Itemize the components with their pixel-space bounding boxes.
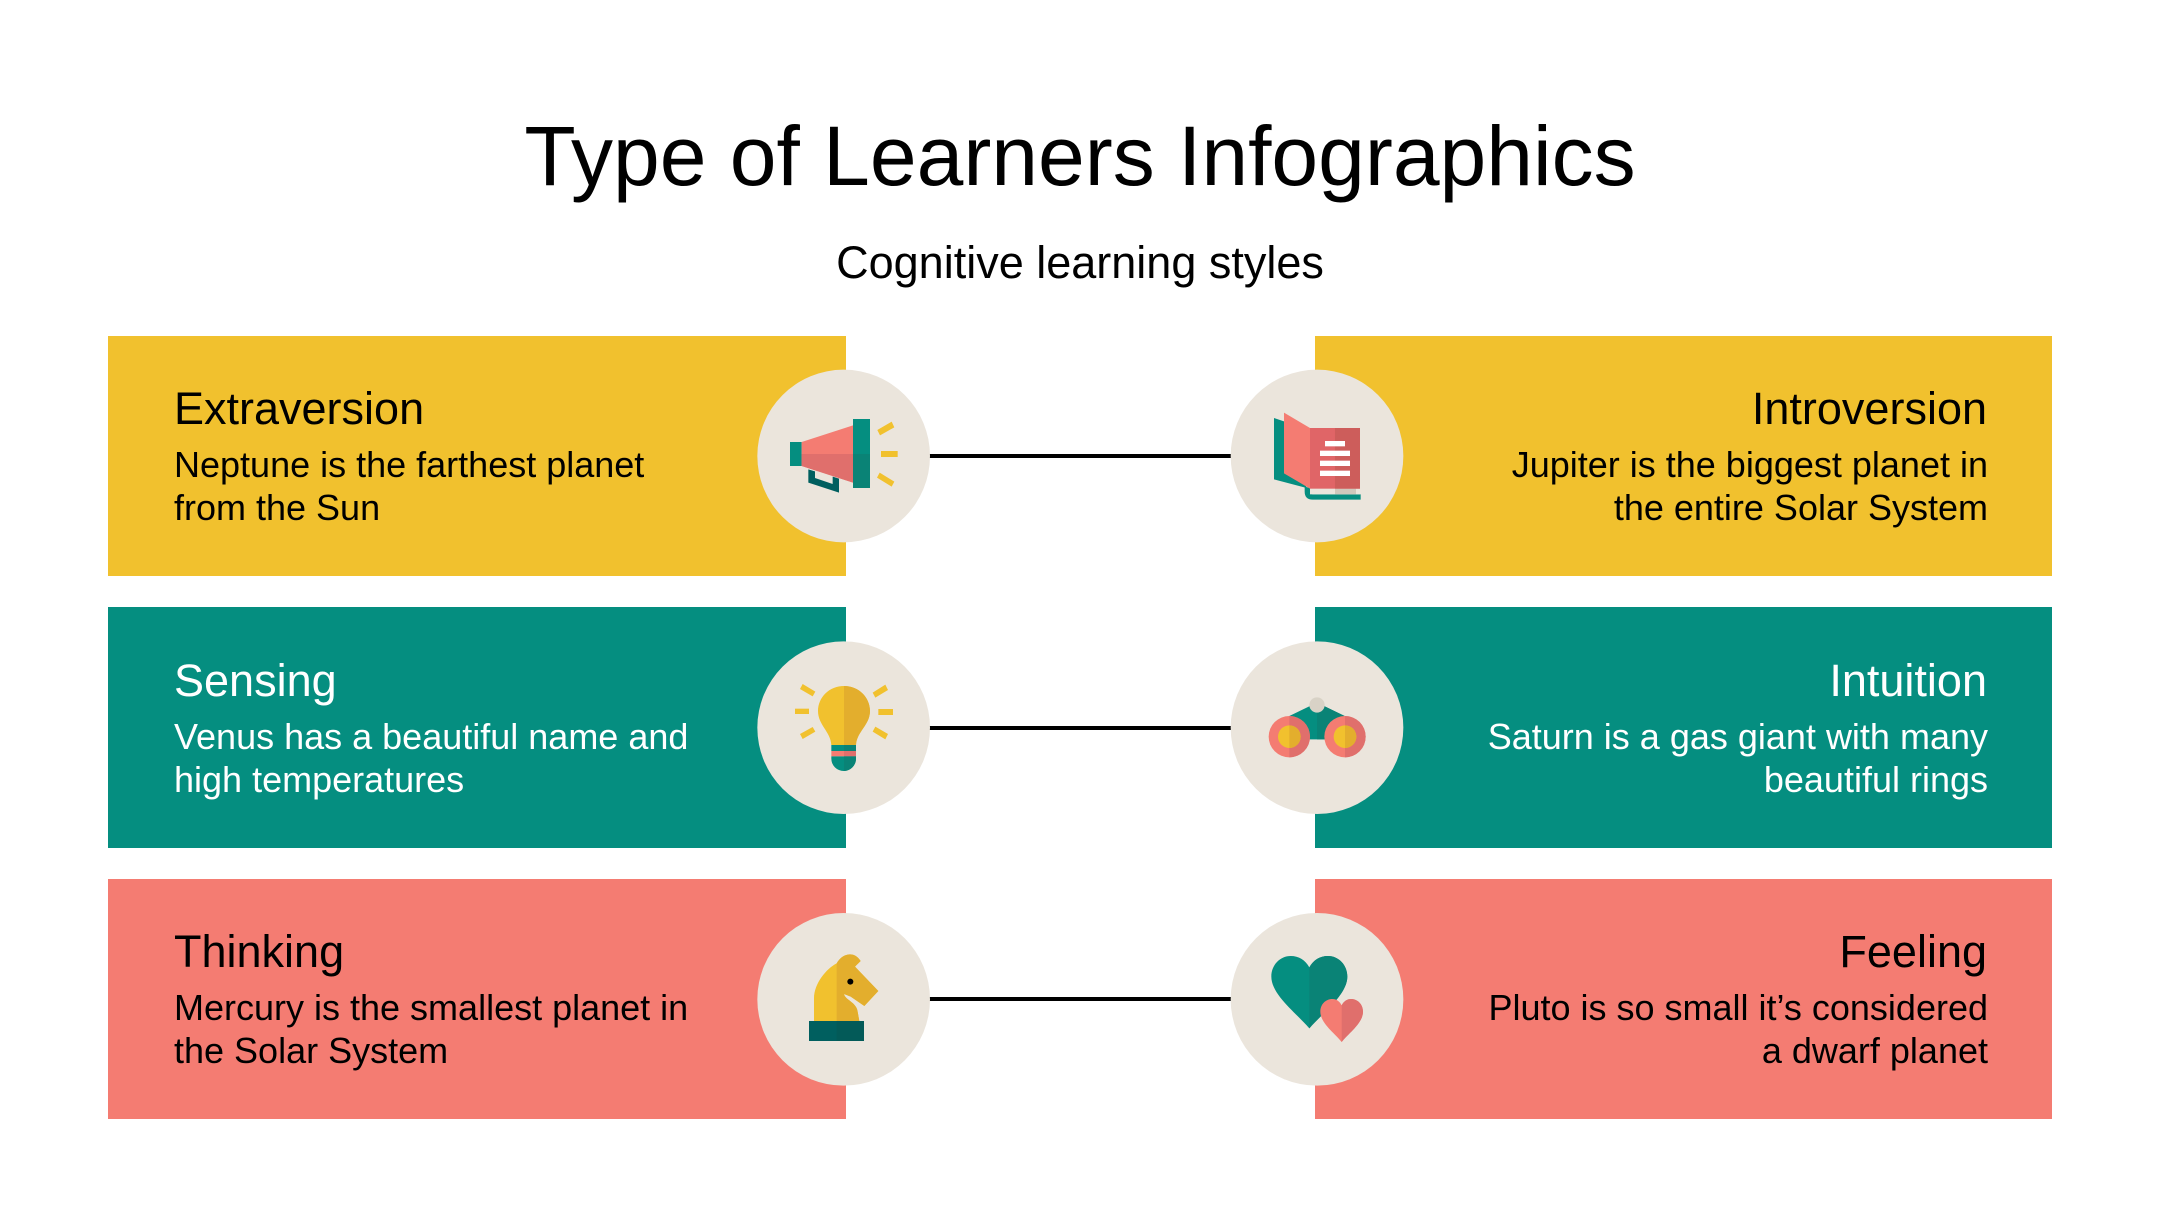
text: extraversion description	[174, 444, 644, 528]
text: sensing description: high temperatures	[174, 759, 464, 800]
panel: introversion	[1315, 336, 2052, 576]
panel: sensing	[108, 607, 846, 848]
text: intuition description	[1488, 716, 1988, 800]
text: sensing description	[174, 716, 688, 800]
icon: light bulb	[757, 641, 930, 814]
heading: sensing: Sensing	[174, 655, 337, 706]
text: intuition description: Saturn is a gas giant with many	[1488, 716, 1988, 757]
text: extraversion description: from the Sun	[174, 487, 380, 528]
heading: introversion: Introversion	[1752, 383, 1987, 434]
text: feeling description: Pluto is so small it’s considered	[1488, 987, 1988, 1028]
panel: intuition	[1315, 607, 2052, 848]
text: thinking description: Mercury is the smallest planet in	[174, 987, 688, 1028]
text: intuition description: beautiful rings	[1764, 759, 1988, 800]
subtitle: Cognitive learning styles	[836, 237, 1324, 288]
panel: extraversion	[108, 336, 846, 576]
icon: binoculars	[1231, 641, 1403, 814]
panel: thinking	[108, 879, 846, 1119]
panel: feeling	[1315, 879, 2052, 1119]
text: introversion description: Jupiter is the biggest planet in	[1512, 444, 1988, 485]
text: introversion description	[1512, 444, 1988, 528]
heading: thinking: Thinking	[174, 926, 344, 977]
icon: book	[1231, 370, 1403, 542]
icon: hearts	[1231, 913, 1403, 1086]
text: feeling description: a dwarf planet	[1762, 1030, 1988, 1071]
text: sensing description: Venus has a beautiful name and	[174, 716, 688, 757]
text: thinking description	[174, 987, 688, 1071]
icon: megaphone	[757, 370, 930, 542]
heading: intuition: Intuition	[1829, 655, 1987, 706]
title: Type of Learners Infographics	[524, 109, 1636, 203]
text: feeling description	[1488, 987, 1988, 1071]
connector line row 2	[928, 726, 1233, 730]
text: thinking description: the Solar System	[174, 1030, 448, 1071]
heading: feeling: Feeling	[1839, 926, 1987, 977]
text: introversion description: the entire Solar System	[1614, 487, 1988, 528]
heading: extraversion: Extraversion	[174, 383, 424, 434]
icon: chess knight	[757, 913, 930, 1086]
text: extraversion description: Neptune is the farthest planet	[174, 444, 644, 485]
connector line row 1	[928, 454, 1233, 458]
connector line row 3	[928, 997, 1233, 1001]
